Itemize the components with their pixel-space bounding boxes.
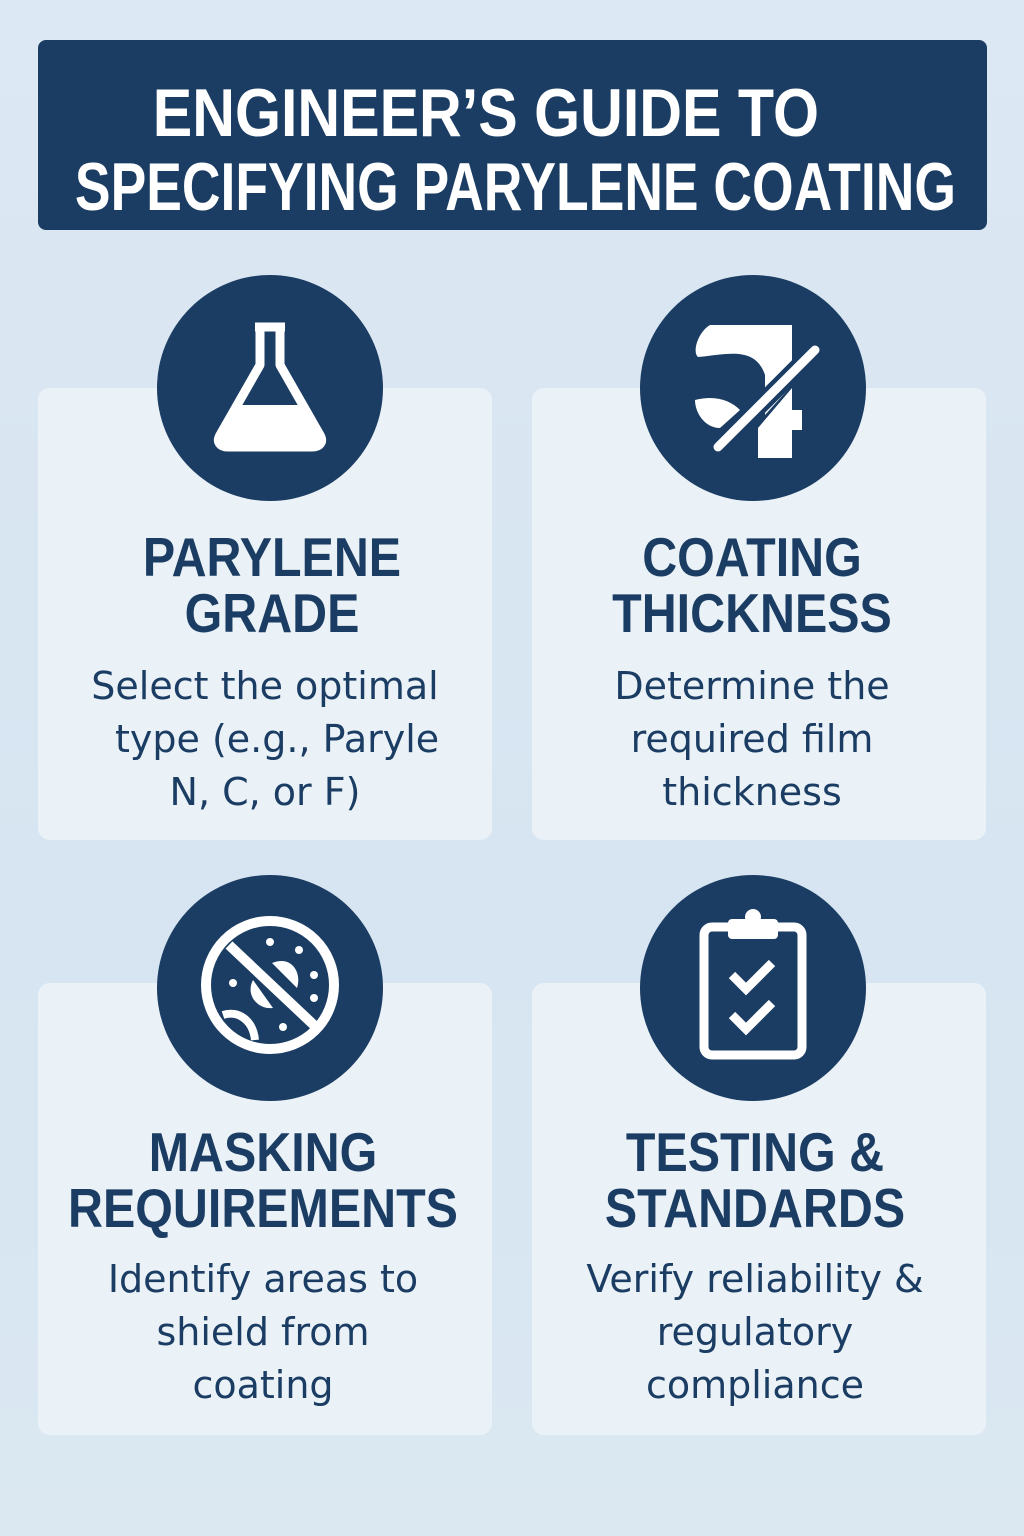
heading: parylene grade <box>143 526 401 644</box>
heading: coating thickness <box>612 526 892 644</box>
text: parylene grade <box>91 664 439 814</box>
heading: parylene grade: PARYLENE <box>143 526 401 588</box>
heading: testing & standards: TESTING & <box>626 1121 884 1183</box>
title <box>38 40 987 230</box>
panel: coating thickness <box>532 388 986 840</box>
title: ENGINEER’S GUIDE TO <box>152 75 819 151</box>
heading: testing & standards: STANDARDS <box>605 1177 905 1239</box>
text: masking requirements: coating <box>192 1363 334 1407</box>
heading: masking requirements: MASKING <box>149 1121 377 1183</box>
text: masking requirements: shield from <box>156 1310 370 1354</box>
heading: coating thickness: COATING <box>642 526 862 588</box>
panel: masking requirements <box>38 983 492 1435</box>
text: coating thickness <box>614 664 890 814</box>
panel: parylene grade <box>38 388 492 840</box>
heading: masking requirements: REQUIREMENTS <box>68 1177 458 1239</box>
heading: testing & standards <box>605 1121 905 1239</box>
text: masking requirements: Identify areas to <box>108 1257 418 1301</box>
text: coating thickness: required film <box>631 717 873 761</box>
text: testing & standards <box>586 1257 924 1407</box>
title: SPECIFYING PARYLENE COATING <box>75 149 956 225</box>
text: parylene grade: N, C, or F) <box>170 770 360 814</box>
panel: testing & standards <box>532 983 986 1435</box>
icon: clipboard <box>640 875 866 1101</box>
text: coating thickness: Determine the <box>614 664 890 708</box>
text: testing & standards: compliance <box>646 1363 864 1407</box>
heading: parylene grade: GRADE <box>185 582 359 644</box>
heading: coating thickness: THICKNESS <box>612 582 892 644</box>
icon: masking <box>157 875 383 1101</box>
text: masking requirements <box>108 1257 418 1407</box>
heading: masking requirements <box>68 1121 458 1239</box>
text: parylene grade: type (e.g., Paryle <box>115 717 439 761</box>
text: testing & standards: Verify reliability & <box>586 1257 924 1301</box>
text: parylene grade: Select the optimal <box>91 664 439 708</box>
text: coating thickness: thickness <box>662 770 842 814</box>
text: testing & standards: regulatory <box>657 1310 853 1354</box>
icon: flask <box>157 275 383 501</box>
icon: thickness <box>640 275 866 501</box>
